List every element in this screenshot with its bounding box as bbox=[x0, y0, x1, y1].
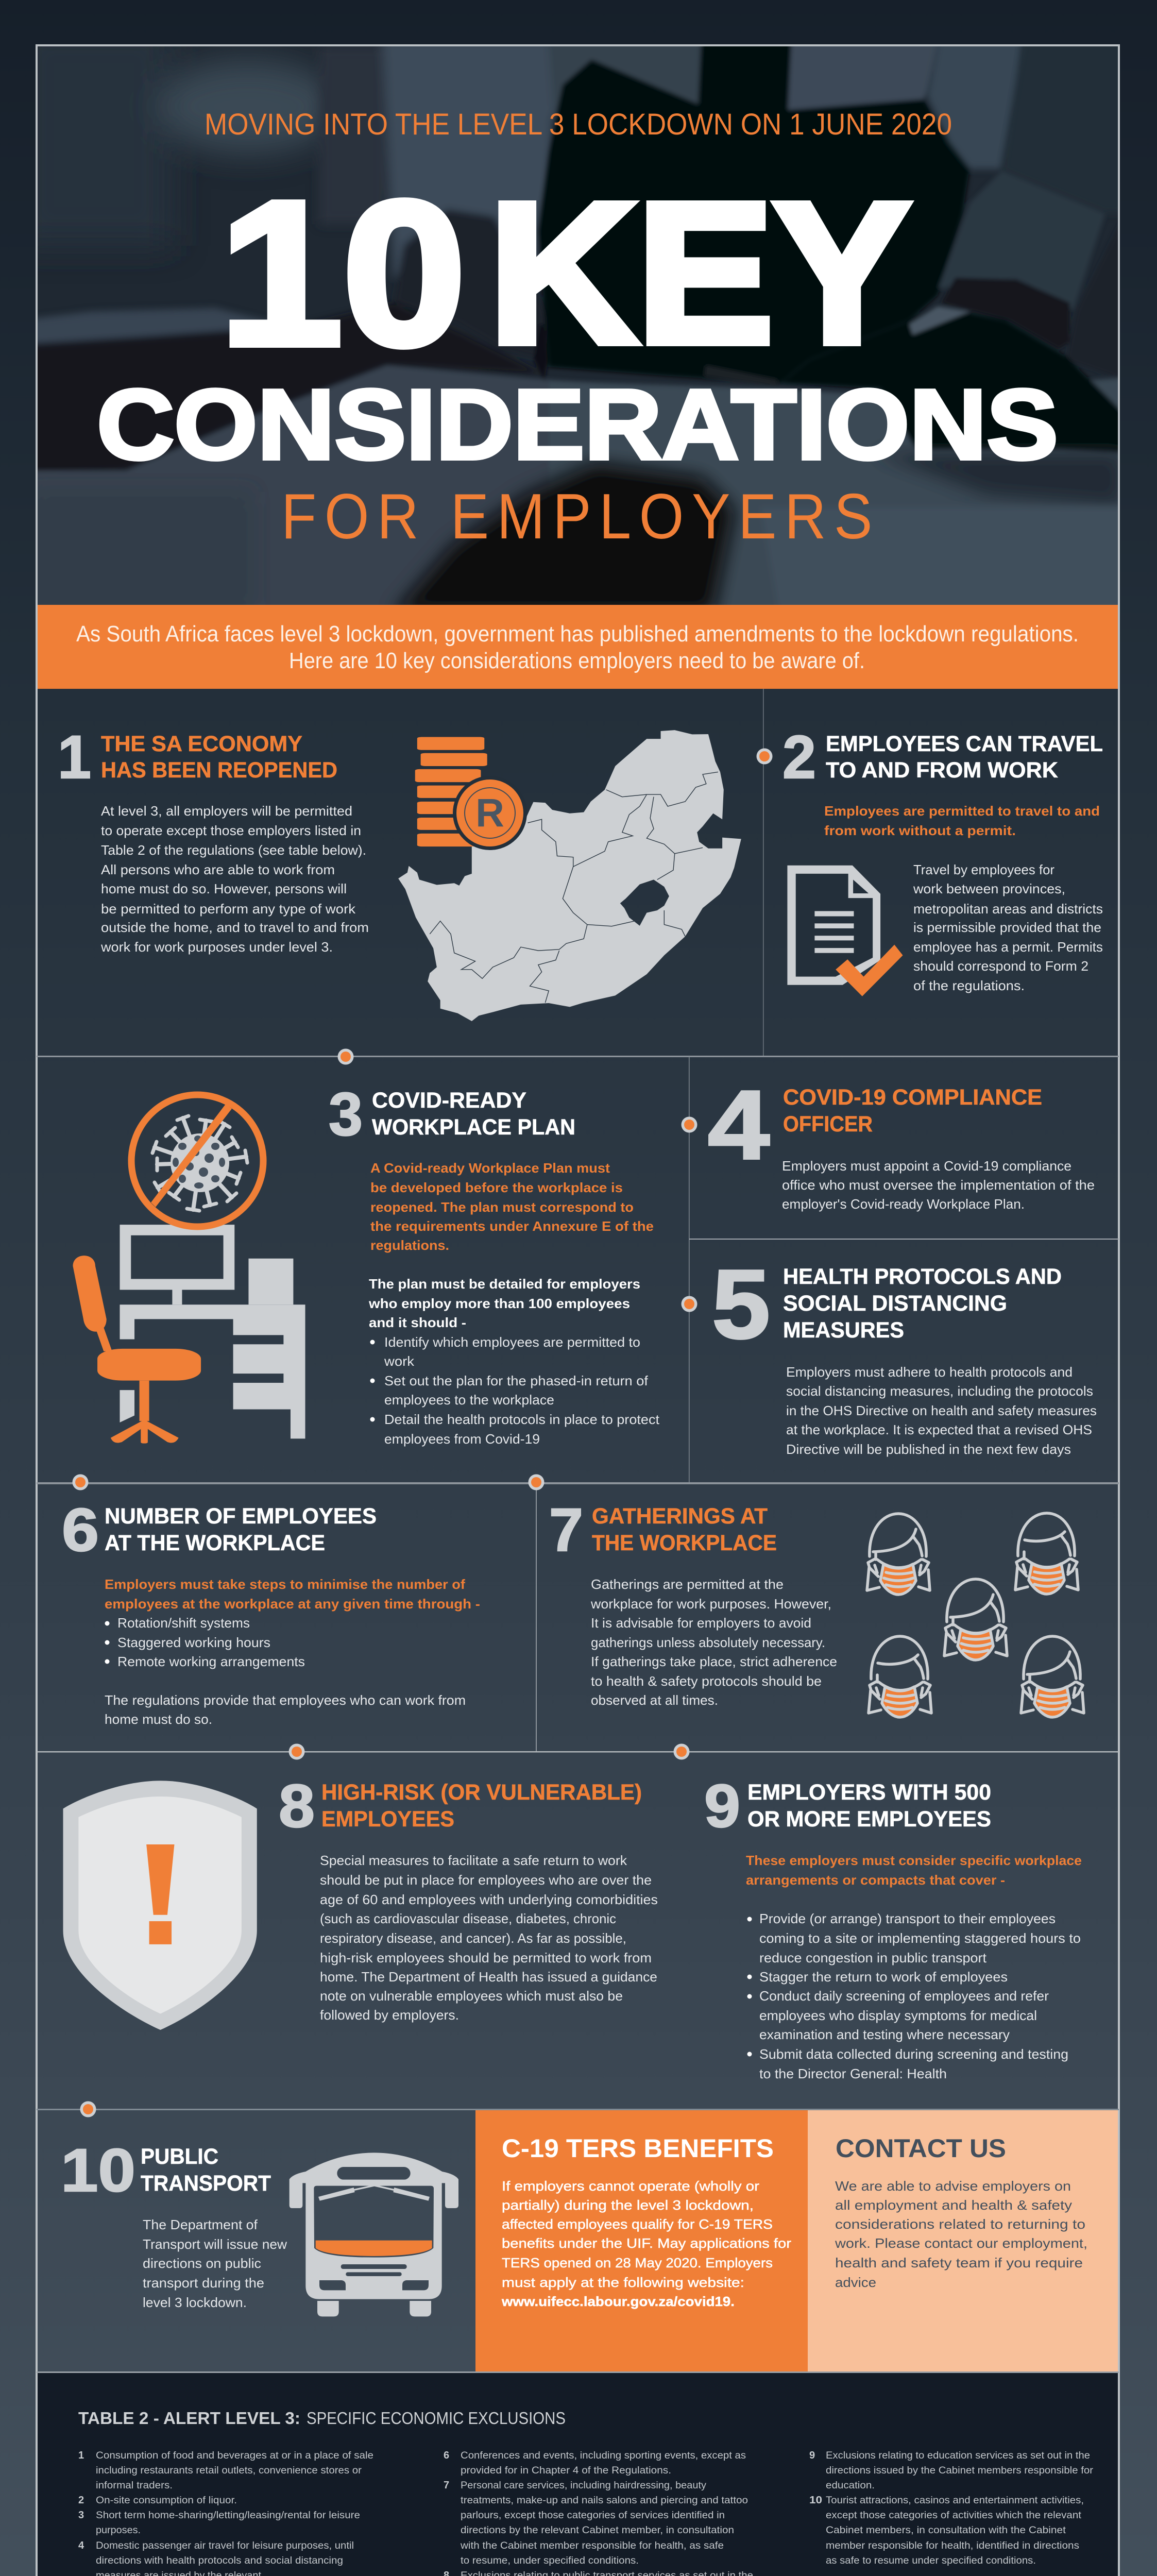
icon: coin stack: R bbox=[475, 791, 504, 835]
body text 2: Travel by employees for bbox=[913, 862, 1054, 877]
heading 6 bbox=[105, 1504, 377, 1555]
table column 1: 3 bbox=[78, 2510, 84, 2521]
table column 2: treatments, make-up and nails salons and piercing and tattoo bbox=[461, 2495, 748, 2506]
hero title 10: 10 bbox=[219, 159, 466, 388]
table column 1: On-site consumption of liquor. bbox=[96, 2495, 237, 2506]
heading 10: PUBLIC bbox=[141, 2144, 218, 2169]
body text 7 bbox=[590, 1577, 837, 1708]
white lead text 3: The plan must be detailed for employers bbox=[369, 1276, 640, 1292]
body text 8: should be put in place for employees who are over the bbox=[320, 1872, 652, 1888]
body text 8: home. The Department of Health has issued a guidance bbox=[320, 1969, 657, 1985]
body text 4: Employers must appoint a Covid-19 compliance bbox=[782, 1158, 1071, 1174]
body text contact: work. Please contact our employment, bbox=[835, 2235, 1087, 2251]
heading 8: HIGH-RISK (OR VULNERABLE) bbox=[321, 1780, 642, 1805]
table column 2: to resume, under specified conditions. bbox=[461, 2555, 639, 2566]
icon: warning shield bbox=[63, 1781, 257, 2030]
heading 7: GATHERINGS AT bbox=[592, 1504, 768, 1529]
body text 10: The Department of bbox=[143, 2217, 258, 2232]
orange lead text 6: Employers must take steps to minimise the number of bbox=[105, 1577, 465, 1592]
number 5: 5 bbox=[712, 1250, 770, 1359]
heading 9: OR MORE EMPLOYEES bbox=[747, 1807, 991, 1832]
section 7: gatherings bbox=[549, 1496, 1084, 1717]
bullet list 9: coming to a site or implementing staggered hours to bbox=[759, 1930, 1081, 1946]
table column 3: Cabinet members, in consultation with the Cabinet bbox=[826, 2524, 1066, 2536]
body text 5: Directive will be published in the next few days bbox=[786, 1442, 1071, 1457]
panel: C-19 TERS benefits bbox=[501, 2134, 791, 2309]
heading 8 bbox=[321, 1780, 642, 1832]
body text 1: be permitted to perform any type of work bbox=[101, 901, 356, 917]
body text 6: home must do so. bbox=[105, 1711, 212, 1727]
number 1: 1 bbox=[58, 723, 91, 791]
body text 8: age of 60 and employees with underlying comorbidities bbox=[320, 1892, 658, 1907]
orange lead text 9 bbox=[746, 1853, 1082, 1888]
table column 2 bbox=[444, 2450, 753, 2576]
table column 2: 7 bbox=[444, 2480, 449, 2491]
icon: coin stack bbox=[415, 737, 527, 850]
body text 1: to operate except those employers listed in bbox=[101, 823, 361, 838]
table column 2: Personal care services, including hairdressing, beauty bbox=[461, 2480, 706, 2491]
orange lead text 3: regulations. bbox=[370, 1238, 449, 1253]
body text 1: Table 2 of the regulations (see table below). bbox=[101, 842, 366, 858]
body text 8: (such as cardiovascular disease, diabetes, chronic bbox=[320, 1911, 616, 1926]
table column 3: except those categories of activities which the relevant bbox=[826, 2510, 1082, 2521]
panel: table 2 exclusions bbox=[78, 2409, 1094, 2576]
hero title CONSIDERATIONS: CONSIDERATIONS bbox=[97, 369, 1058, 480]
body text 1: work for work purposes under level 3. bbox=[100, 939, 333, 955]
table column 2: with the Cabinet member responsible for health, as safe bbox=[460, 2540, 724, 2551]
body text 6: The regulations provide that employees who can work from bbox=[105, 1692, 466, 1708]
body text contact: all employment and health & safety bbox=[835, 2197, 1072, 2213]
heading 8: EMPLOYEES bbox=[321, 1807, 454, 1832]
icon: people wearing masks bbox=[867, 1513, 1084, 1717]
table column 2: provided for in Chapter 4 of the Regulations. bbox=[461, 2465, 671, 2476]
orange lead text 6 bbox=[105, 1577, 480, 1612]
body text 2: is permissible provided that the bbox=[913, 920, 1101, 935]
hero title KEY: KEY bbox=[489, 162, 910, 385]
heading 5: HEALTH PROTOCOLS AND bbox=[783, 1264, 1062, 1289]
heading 5: SOCIAL DISTANCING bbox=[783, 1291, 1007, 1316]
table heading: SPECIFIC ECONOMIC EXCLUSIONS bbox=[307, 2409, 566, 2428]
number 2: 2 bbox=[782, 723, 816, 791]
table column 2: 6 bbox=[444, 2450, 449, 2461]
icon: bus bbox=[290, 2153, 458, 2316]
bullet list 9: reduce congestion in public transport bbox=[759, 1950, 987, 1965]
body text 6 bbox=[105, 1692, 466, 1727]
section 1: the SA economy bbox=[58, 723, 741, 1021]
number 9: 9 bbox=[704, 1772, 740, 1840]
table column 3: Exclusions relating to education services as set out in the bbox=[826, 2450, 1090, 2461]
body text 7: workplace for work purposes. However, bbox=[590, 1596, 831, 1612]
body text 7: to health & safety protocols should be bbox=[591, 1673, 822, 1689]
table column 1: purposes. bbox=[96, 2524, 141, 2536]
body text contact: considerations related to returning to bbox=[835, 2216, 1085, 2232]
body text TERS: must apply at the following website: bbox=[502, 2275, 744, 2290]
orange lead text 6: employees at the workplace at any given time through - bbox=[105, 1596, 480, 1612]
white lead text 3: who employ more than 100 employees bbox=[368, 1296, 630, 1311]
heading 3 bbox=[372, 1088, 575, 1140]
table column 1 bbox=[78, 2450, 373, 2576]
heading 5 bbox=[783, 1264, 1062, 1343]
body text 7: If gatherings take place, strict adherence bbox=[591, 1654, 837, 1669]
heading 9: EMPLOYERS WITH 500 bbox=[747, 1780, 991, 1805]
heading 5: MEASURES bbox=[783, 1318, 904, 1343]
table column 3: member responsible for health, identified in directions bbox=[826, 2540, 1079, 2551]
bullet list 9: employees who display symptoms for medical bbox=[759, 2008, 1037, 2023]
orange lead text 3 bbox=[370, 1160, 654, 1253]
heading 6: AT THE WORKPLACE bbox=[105, 1531, 325, 1555]
number 6: 6 bbox=[62, 1496, 99, 1564]
bullet list 9 bbox=[747, 1911, 1081, 2081]
hero subtitle: MOVING INTO THE LEVEL 3 LOCKDOWN ON 1 JUNE 2020 bbox=[205, 108, 952, 141]
heading 10: TRANSPORT bbox=[141, 2171, 271, 2196]
bullet list 9: Provide (or arrange) transport to their employees bbox=[759, 1911, 1056, 1926]
bullet list 3: Detail the health protocols in place to protect bbox=[384, 1412, 660, 1427]
heading 10 bbox=[141, 2144, 271, 2196]
bullet list 6: Staggered working hours bbox=[117, 1635, 270, 1650]
orange lead text 3: A Covid-ready Workplace Plan must bbox=[370, 1160, 610, 1176]
heading 1: HAS BEEN REOPENED bbox=[101, 758, 337, 783]
body text 5: social distancing measures, including the protocols bbox=[786, 1383, 1093, 1399]
bullet list 6: Remote working arrangements bbox=[117, 1654, 305, 1669]
heading 4 bbox=[783, 1085, 1042, 1137]
map of South Africa bbox=[398, 730, 741, 1021]
orange intro banner: Here are 10 key considerations employers need to be aware of. bbox=[289, 648, 865, 673]
table column 1: 2 bbox=[78, 2495, 84, 2506]
orange lead text 3: be developed before the workplace is bbox=[370, 1180, 623, 1195]
body text 1: home must do so. However, persons will bbox=[101, 881, 347, 896]
section 10: public transport bbox=[61, 2137, 458, 2316]
connector nodes bbox=[72, 748, 773, 2117]
body text 2: should correspond to Form 2 bbox=[913, 958, 1088, 974]
icon: no-virus sign bbox=[131, 1095, 263, 1227]
body text 7: gatherings unless absolutely necessary. bbox=[591, 1635, 825, 1650]
table column 1: including restaurants retail outlets, convenience stores or bbox=[96, 2465, 362, 2476]
number 8: 8 bbox=[279, 1772, 315, 1840]
heading 2: EMPLOYEES CAN TRAVEL bbox=[826, 732, 1103, 756]
body text 8: Special measures to facilitate a safe return to work bbox=[320, 1853, 627, 1868]
bullet list 9: to the Director General: Health bbox=[759, 2066, 947, 2081]
body text 2: work between provinces, bbox=[913, 881, 1065, 896]
table column 2: directions by the relevant Cabinet member, in consultation bbox=[461, 2524, 734, 2536]
body text 5: in the OHS Directive on health and safety measures bbox=[786, 1403, 1097, 1418]
icon: orange chair bbox=[73, 1256, 201, 1444]
orange lead text 2: Employees are permitted to travel to and bbox=[824, 803, 1100, 819]
orange lead text 3: the requirements under Annexure E of the bbox=[370, 1218, 654, 1234]
table heading bbox=[78, 2409, 566, 2428]
table column 3: directions issued by the Cabinet members responsible for bbox=[826, 2465, 1094, 2476]
icon: desk and computer bbox=[120, 1225, 305, 1438]
table column 1: 4 bbox=[78, 2540, 84, 2551]
body text 5: at the workplace. It is expected that a revised OHS bbox=[786, 1422, 1092, 1437]
body text TERS: partially) during the level 3 lockdown, bbox=[502, 2197, 754, 2213]
table column 1: Short term home-sharing/letting/leasing/rental for leisure bbox=[96, 2510, 360, 2521]
table column 3: 9 bbox=[809, 2450, 815, 2461]
body text contact: We are able to advise employers on bbox=[835, 2178, 1071, 2194]
bullet list 3: work bbox=[384, 1353, 415, 1369]
bullet list 6: Rotation/shift systems bbox=[117, 1615, 250, 1631]
body text 10: Transport will issue new bbox=[143, 2236, 287, 2252]
hero title FOR EMPLOYERS: FOR EMPLOYERS bbox=[281, 481, 873, 552]
body text 1: All persons who are able to work from bbox=[101, 862, 335, 877]
body text TERS: benefits under the UIF. May applications for bbox=[502, 2235, 791, 2251]
table column 1: directions with health protocols and social distancing bbox=[96, 2555, 343, 2566]
body text 1: At level 3, all employers will be permitted bbox=[101, 803, 352, 819]
body text 4: office who must oversee the implementation of the bbox=[782, 1177, 1095, 1193]
heading 4: COVID-19 COMPLIANCE bbox=[783, 1085, 1042, 1110]
body text 2: of the regulations. bbox=[913, 978, 1025, 993]
heading contact: CONTACT US bbox=[836, 2134, 1006, 2163]
body text 10 bbox=[143, 2217, 287, 2310]
table panel background bbox=[37, 2372, 1119, 2576]
body text 5: Employers must adhere to health protocols and bbox=[786, 1364, 1073, 1380]
heading 7 bbox=[592, 1504, 777, 1555]
table column 3: as safe to resume under specified conditions. bbox=[826, 2555, 1036, 2566]
icon: document with check bbox=[787, 866, 903, 996]
table column 1: Consumption of food and beverages at or in a place of sale bbox=[96, 2450, 373, 2461]
orange lead text 2 bbox=[824, 803, 1100, 838]
number 3: 3 bbox=[329, 1080, 363, 1148]
heading TERS: C-19 TERS BENEFITS bbox=[502, 2134, 774, 2163]
body text 5 bbox=[786, 1364, 1097, 1457]
table column 3: Tourist attractions, casinos and entertainment activities, bbox=[826, 2495, 1084, 2506]
body text TERS: If employers cannot operate (wholly or bbox=[502, 2178, 759, 2194]
white lead text 3: and it should - bbox=[369, 1315, 466, 1330]
body text contact: health and safety team if you require bbox=[835, 2255, 1083, 2270]
body text 8: note on vulnerable employees which must also be bbox=[320, 1988, 623, 2004]
body text 7: It is advisable for employers to avoid bbox=[591, 1615, 811, 1631]
heading 1: THE SA ECONOMY bbox=[101, 732, 302, 756]
bullet list 9: Stagger the return to work of employees bbox=[759, 1969, 1008, 1985]
body text 8 bbox=[320, 1853, 658, 2023]
heading 2: TO AND FROM WORK bbox=[826, 758, 1058, 783]
bullet list 9: Conduct daily screening of employees and refer bbox=[759, 1988, 1049, 2004]
body text 10: transport during the bbox=[143, 2275, 264, 2291]
bullet list 3: Identify which employees are permitted to bbox=[384, 1334, 640, 1350]
number 7: 7 bbox=[549, 1496, 583, 1564]
heading 1 bbox=[101, 732, 337, 783]
bullet list 6 bbox=[105, 1615, 305, 1669]
white lead text 3 bbox=[368, 1276, 640, 1330]
heading 3: COVID-READY bbox=[372, 1088, 526, 1113]
bullet list 3 bbox=[370, 1334, 660, 1447]
number 4: 4 bbox=[708, 1071, 770, 1180]
body text 10: level 3 lockdown. bbox=[143, 2295, 247, 2310]
bullet list 3: employees from Covid-19 bbox=[384, 1431, 540, 1447]
heading 2 bbox=[826, 732, 1103, 783]
body text TERS bbox=[501, 2178, 791, 2309]
bullet list 3: Set out the plan for the phased-in return of bbox=[384, 1373, 649, 1388]
body text 2: employee has a permit. Permits bbox=[913, 939, 1103, 955]
heading 6: NUMBER OF EMPLOYEES bbox=[105, 1504, 377, 1529]
table column 3: 10 bbox=[809, 2495, 822, 2506]
heading 7: THE WORKPLACE bbox=[592, 1531, 777, 1555]
orange lead text 3: reopened. The plan must correspond to bbox=[370, 1199, 634, 1215]
section 6: number of employees bbox=[62, 1496, 480, 1727]
body text 1: outside the home, and to travel to and from bbox=[101, 920, 369, 935]
orange lead text 9: arrangements or compacts that cover - bbox=[746, 1872, 1005, 1888]
table column 3: education. bbox=[826, 2480, 875, 2491]
heading 9 bbox=[747, 1780, 991, 1832]
body text contact bbox=[835, 2178, 1087, 2290]
table column 3 bbox=[809, 2450, 1094, 2566]
bullet list 9: examination and testing where necessary bbox=[759, 2027, 1010, 2042]
orange TERS panel background bbox=[475, 2109, 808, 2372]
bullet list 9: Submit data collected during screening and testing bbox=[759, 2046, 1068, 2062]
heading 4: OFFICER bbox=[783, 1112, 873, 1137]
body text TERS: affected employees qualify for C-19 TERS bbox=[502, 2216, 773, 2232]
section 8: high-risk employees bbox=[63, 1772, 658, 2030]
body text 8: respiratory disease, and cancer). As far as possible, bbox=[320, 1930, 626, 1946]
table column 1: informal traders. bbox=[96, 2480, 173, 2491]
body text 7: observed at all times. bbox=[591, 1692, 718, 1708]
body text 4: employer's Covid-ready Workplace Plan. bbox=[782, 1196, 1025, 1212]
body text 1 bbox=[100, 803, 369, 955]
section 4: compliance officer bbox=[708, 1071, 1095, 1212]
section 2: employees can travel bbox=[782, 723, 1103, 996]
table column 1: 1 bbox=[78, 2450, 84, 2461]
body text 10: directions on public bbox=[143, 2256, 261, 2271]
section 3: covid-ready workplace plan bbox=[73, 1080, 660, 1447]
number 10: 10 bbox=[61, 2137, 135, 2205]
body text 2 bbox=[913, 862, 1103, 993]
body text contact: advice bbox=[835, 2275, 876, 2290]
heading 3: WORKPLACE PLAN bbox=[372, 1115, 575, 1140]
peach contact panel background bbox=[808, 2109, 1119, 2372]
body text TERS: TERS opened on 28 May 2020. Employers bbox=[502, 2255, 773, 2270]
body text 8: high-risk employees should be permitted to work from bbox=[320, 1950, 652, 1965]
body text TERS: www.uifecc.labour.gov.za/covid19. bbox=[501, 2294, 735, 2309]
section 9: employers with 500 or more employees bbox=[704, 1772, 1082, 2081]
hero panel with blurred photo bbox=[15, 24, 1123, 617]
body text 8: followed by employers. bbox=[320, 2007, 459, 2023]
section 5: health protocols bbox=[712, 1250, 1097, 1457]
body text 7: Gatherings are permitted at the bbox=[591, 1577, 784, 1592]
orange lead text 2: from work without a permit. bbox=[824, 823, 1016, 838]
table heading: TABLE 2 - ALERT LEVEL 3: bbox=[78, 2409, 300, 2428]
bullet list 3: employees to the workplace bbox=[384, 1392, 554, 1408]
orange lead text 9: These employers must consider specific workplace bbox=[746, 1853, 1082, 1868]
table column 2: Conferences and events, including sporting events, except as bbox=[461, 2450, 746, 2461]
body text 4 bbox=[782, 1158, 1095, 1212]
table column 1: Domestic passenger air travel for leisure purposes, until bbox=[96, 2540, 354, 2551]
body text 2: metropolitan areas and districts bbox=[913, 901, 1103, 917]
table column 2: parlours, except those categories of services identified in bbox=[461, 2510, 725, 2521]
panel: contact us bbox=[835, 2134, 1087, 2290]
orange intro banner: As South Africa faces level 3 lockdown, government has published amendments to the lockdown regulations. bbox=[76, 621, 1079, 647]
orange intro banner bbox=[37, 605, 1119, 689]
